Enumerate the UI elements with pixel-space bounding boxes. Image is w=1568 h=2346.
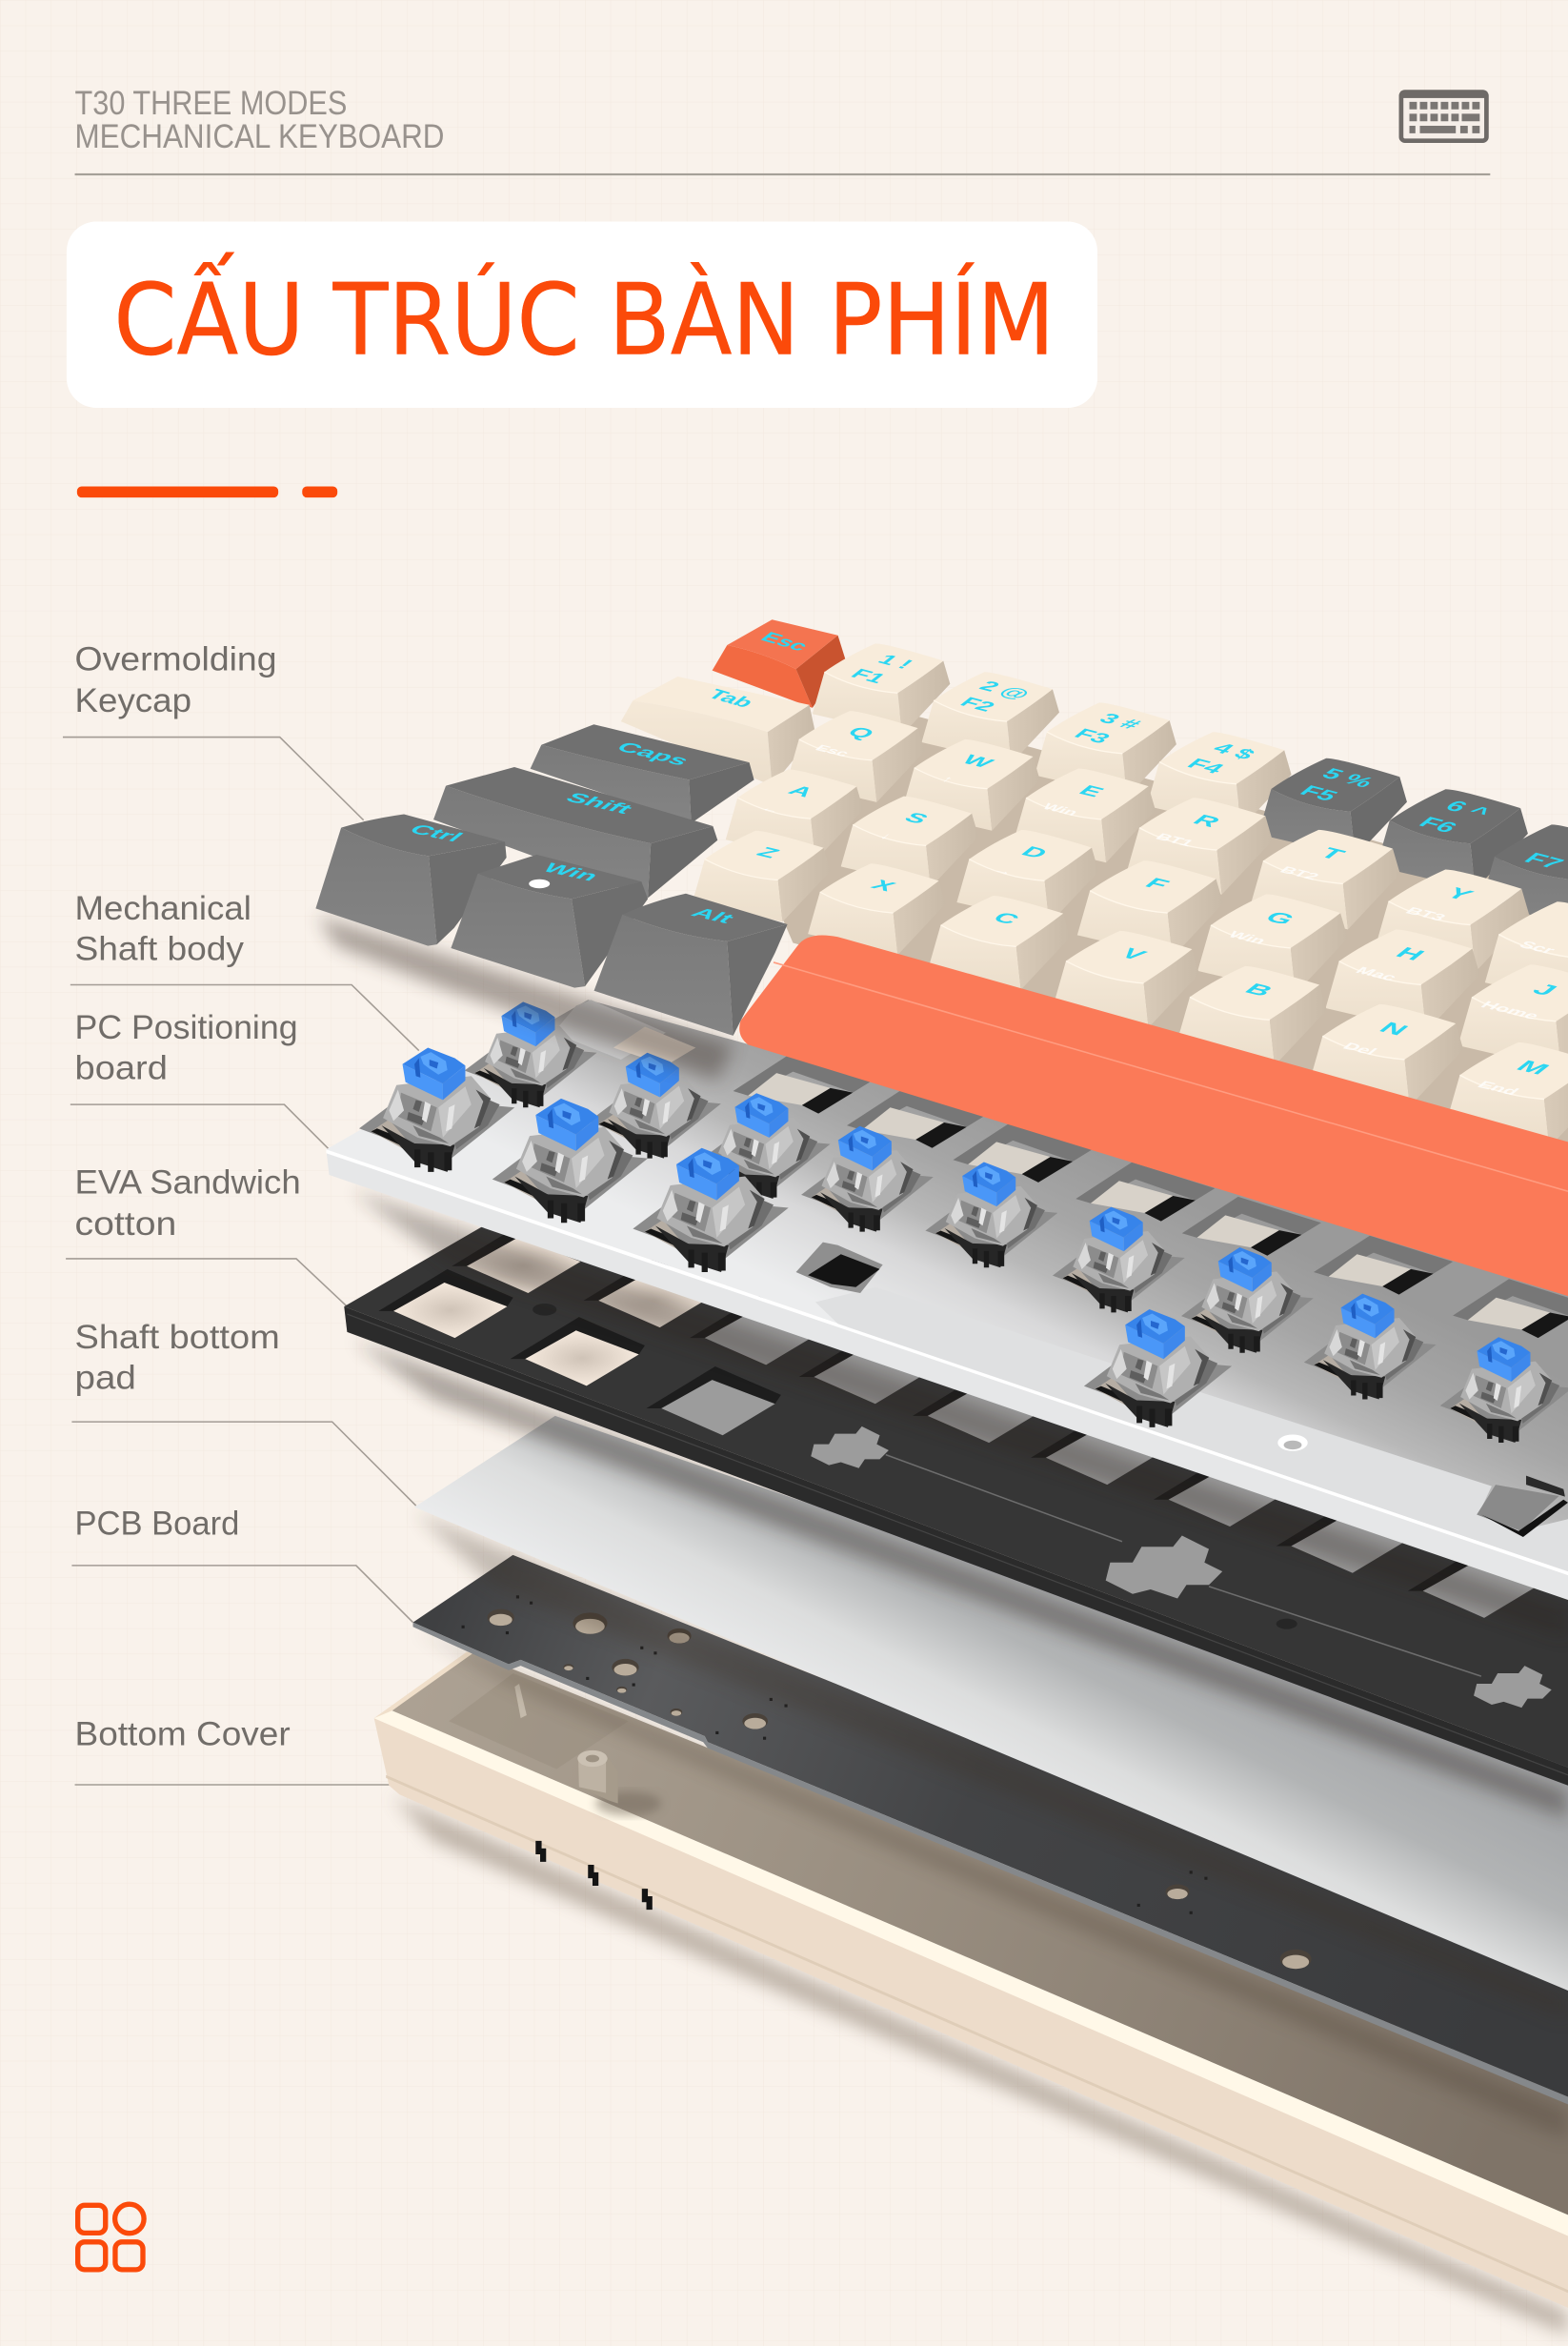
layer: PC positioning board <box>326 1000 1568 1639</box>
PCB solder holes <box>462 1595 1312 1969</box>
function row keys: 6 ^ <box>1439 798 1496 821</box>
mechanical switches <box>359 1001 1568 1443</box>
function row keys: 5 % <box>1317 765 1379 791</box>
title text: CẤU TRÚC BÀN PHÍM <box>113 253 1055 377</box>
label: EVA Sandwich cotton: EVA Sandwich <box>75 1164 301 1202</box>
alphanumeric keys: Q <box>842 724 879 742</box>
cover port notches <box>535 1841 653 1910</box>
label: Mechanical Shaft body <box>75 890 251 968</box>
alphanumeric keys: BT1 <box>1152 831 1197 848</box>
function row keys: F5 <box>1295 782 1343 804</box>
alphanumeric keys: M <box>1511 1057 1555 1078</box>
stabilizer cutouts <box>796 1243 1568 1537</box>
alphanumeric keys: Home <box>1478 999 1543 1021</box>
function row keys: 4 $ <box>1208 740 1260 763</box>
keycaps layer <box>315 619 1568 1296</box>
alphanumeric keys: W <box>956 752 998 771</box>
alphanumeric keys: J <box>1527 981 1562 999</box>
label: Shaft bottom pad: Shaft bottom <box>75 1319 280 1356</box>
Tab key <box>621 677 815 786</box>
function row keys: 3 # <box>1094 710 1146 733</box>
icon: four shapes <box>78 2204 144 2270</box>
alphanumeric keys: E <box>1074 782 1109 800</box>
leader lines <box>63 738 419 1785</box>
Win key <box>451 855 648 988</box>
Esc key: Esc <box>756 629 814 654</box>
alphanumeric keys: T <box>1315 844 1350 863</box>
alphanumeric keys: S <box>899 810 933 827</box>
Ctrl key <box>315 814 507 946</box>
label: PC Positioning board: PC Positioning <box>75 1009 298 1046</box>
alphanumeric keys: Mac <box>1352 964 1401 983</box>
alphanumeric keys: H <box>1391 943 1431 963</box>
Shift key <box>433 767 717 898</box>
foam cutouts showing background <box>393 1238 713 1385</box>
label: Mechanical Shaft body: Shaft body <box>75 931 245 968</box>
alphanumeric keys: Scr <box>1516 939 1558 956</box>
layer: bottom cover <box>374 1652 1568 2335</box>
Esc key <box>713 619 845 708</box>
plate key openings <box>734 1055 1568 1338</box>
label: Shaft bottom pad: pad <box>75 1360 136 1397</box>
alphanumeric keys: Esc <box>812 743 853 758</box>
alphanumeric keys: R <box>1188 812 1225 830</box>
function row keys: 1 ! <box>874 652 918 672</box>
cover screw post <box>577 1750 661 1815</box>
plate raised front panel <box>815 1287 1568 1571</box>
alphanumeric keys: ↓ <box>876 831 895 841</box>
label: Overmolding Keycap <box>75 641 277 719</box>
foam cutout walls <box>378 1224 1542 1591</box>
Alt key: Alt <box>686 905 739 926</box>
function row keys: F4 <box>1182 756 1229 778</box>
alphanumeric keys <box>693 711 1568 1147</box>
label: Bottom Cover: Bottom Cover <box>75 1715 291 1752</box>
layer: EVA sandwich cotton <box>344 1224 1568 1818</box>
label: PC Positioning board: board <box>75 1049 168 1086</box>
accent bars <box>77 486 337 497</box>
Ctrl key: Ctrl <box>404 821 468 845</box>
exploded keyboard illustration <box>315 619 1568 2335</box>
alphanumeric keys: BT3 <box>1402 905 1450 923</box>
function row keys: F3 <box>1069 726 1116 747</box>
header text: product name: T30 THREE MODES <box>75 85 347 122</box>
Caps key: Caps <box>612 739 694 769</box>
header divider <box>75 173 1490 175</box>
function row keys: F7 <box>1519 850 1568 872</box>
alphanumeric keys: C <box>988 909 1024 927</box>
label: EVA Sandwich cotton <box>75 1164 301 1243</box>
header text: product name <box>75 85 444 155</box>
alphanumeric keys: F <box>1140 876 1174 893</box>
spacebar keycap <box>739 935 1568 1296</box>
alphanumeric keys: D <box>1016 843 1053 861</box>
Win key: Win <box>537 860 604 884</box>
alphanumeric keys: A <box>783 783 818 800</box>
label: Mechanical Shaft body: Mechanical <box>75 890 251 927</box>
alphanumeric keys: BT2 <box>1277 864 1322 882</box>
label: PCB Board: PCB Board <box>75 1506 239 1543</box>
Tab key: Tab <box>703 686 758 711</box>
alphanumeric keys: Win <box>1039 801 1081 818</box>
Alt key <box>594 894 788 1036</box>
alphanumeric keys: ← <box>757 803 784 816</box>
icon: keyboard <box>1400 91 1487 141</box>
alphanumeric keys: B <box>1239 981 1278 1000</box>
function row keys <box>813 643 1568 927</box>
alphanumeric keys: G <box>1260 908 1300 928</box>
layer: shaft bottom pad <box>414 1416 1568 2020</box>
label: EVA Sandwich cotton: cotton <box>75 1205 176 1243</box>
label: Overmolding Keycap: Overmolding <box>75 641 277 678</box>
alphanumeric keys: → <box>989 864 1017 878</box>
alphanumeric keys: N <box>1374 1019 1414 1039</box>
function row keys: F2 <box>955 694 1000 715</box>
alphanumeric keys: Y <box>1440 884 1479 903</box>
alphanumeric keys: ↑ <box>937 775 956 784</box>
alphanumeric keys: Del <box>1339 1041 1380 1057</box>
function row keys: F1 <box>846 666 891 686</box>
function row keys: F6 <box>1414 814 1462 836</box>
foam cutouts showing pad <box>661 1309 1552 1708</box>
Shift key: Shift <box>560 790 637 817</box>
title panel <box>67 221 1097 408</box>
Caps key <box>531 724 754 823</box>
layer: PCB board <box>412 1555 1568 2140</box>
alphanumeric keys: End <box>1474 1079 1522 1097</box>
label: Overmolding Keycap: Keycap <box>75 682 191 719</box>
header text: product name: MECHANICAL KEYBOARD <box>75 118 444 155</box>
plate mounting hole <box>1277 1434 1308 1451</box>
function row keys: 2 @ <box>975 678 1035 702</box>
alphanumeric keys: X <box>866 878 900 894</box>
label: Shaft bottom pad <box>75 1319 280 1397</box>
alphanumeric keys: V <box>1116 945 1152 963</box>
label: PC Positioning board <box>75 1009 298 1086</box>
alphanumeric keys: Win <box>1224 929 1270 946</box>
alphanumeric keys: Z <box>752 844 784 861</box>
